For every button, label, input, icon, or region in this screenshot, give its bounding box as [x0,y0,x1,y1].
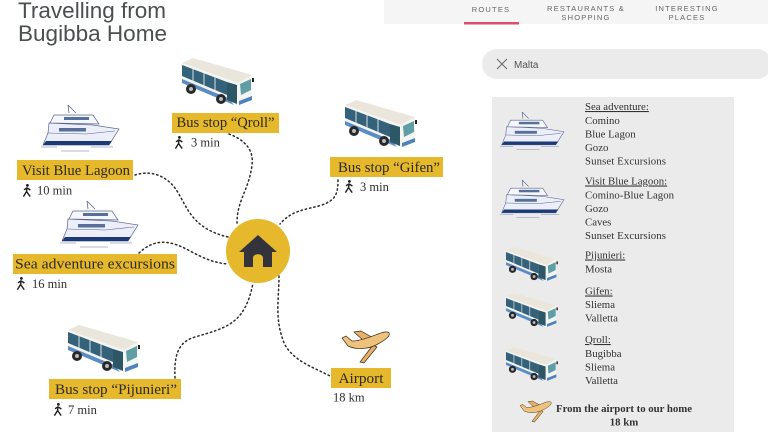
visit blue lagoon list: Gozo [585,203,608,215]
node: bus stop Qroll [172,58,279,150]
navigation tabs: SHOPPING [561,13,611,22]
visit blue lagoon list: Comino-Blue Lagon [585,190,675,202]
node: visit Blue Lagoon [17,105,133,198]
sea adventure list: Sunset Excursions [585,156,666,168]
sea adventure list: Comino [585,115,620,127]
node: sea adventure excursions: 16 min [32,277,68,291]
node: airport: 18 km [333,390,365,404]
sea adventure list: Blue Lagon [585,128,636,140]
Qroll list [506,334,622,387]
navigation tabs: ROUTES [472,5,510,14]
node: bus stop Pijunieri: Bus stop “Pijunieri” [55,382,177,398]
Gifen list: Sliema [585,299,615,311]
node: sea adventure excursions [13,201,177,291]
Gifen list: Valletta [585,312,618,324]
Qroll list: Valletta [585,375,618,387]
visit blue lagoon list: Sunset Excursions [585,230,666,242]
sea adventure list: Sea adventure: [585,101,649,113]
navigation tabs: INTERESTING [655,4,719,13]
node: bus stop Qroll: 3 min [191,136,221,150]
Gifen list [506,286,618,327]
node: airport [331,331,391,404]
node: visit Blue Lagoon: 10 min [37,184,73,198]
central home icon [226,219,290,283]
Pijunieri list: Mosta [585,264,612,276]
navigation tabs: RESTAURANTS & [547,4,625,13]
airport distance note: 18 km [610,416,638,428]
panel: route details [492,97,734,432]
navigation tabs [384,0,768,24]
node: sea adventure excursions: Sea adventure excursions [15,256,175,272]
Qroll list: Qroll: [585,334,611,346]
node: airport: Airport [338,371,384,387]
navigation tabs: PLACES [669,13,705,22]
dotted route lines [135,134,338,378]
Qroll list: Sliema [585,362,615,374]
node: bus stop Gifen: Bus stop “Gifen” [338,160,440,176]
Qroll list: Bugibba [585,348,622,360]
node: bus stop Gifen: 3 min [360,180,390,194]
node: bus stop Gifen [330,100,443,194]
Pijunieri list [506,247,625,281]
airport distance note: From the airport to our home [556,403,692,415]
Pijunieri list: Pijunieri: [585,250,625,262]
title: Bugibba Home [18,21,167,46]
visit blue lagoon list: Caves [585,216,611,228]
visit blue lagoon list: Visit Blue Lagoon: [585,176,667,188]
search bar [482,49,768,79]
sea adventure list [500,101,666,168]
node: bus stop Pijunieri: 7 min [68,403,98,417]
node: bus stop Qroll: Bus stop “Qroll” [176,115,274,131]
sea adventure list: Gozo [585,142,608,154]
airport distance note [520,401,692,428]
Gifen list: Gifen: [585,286,613,298]
node: bus stop Pijunieri [49,325,181,417]
node: visit Blue Lagoon: Visit Blue Lagoon [22,163,131,179]
title [18,0,167,46]
search bar: Malta [514,60,539,71]
visit blue lagoon list [500,176,675,242]
